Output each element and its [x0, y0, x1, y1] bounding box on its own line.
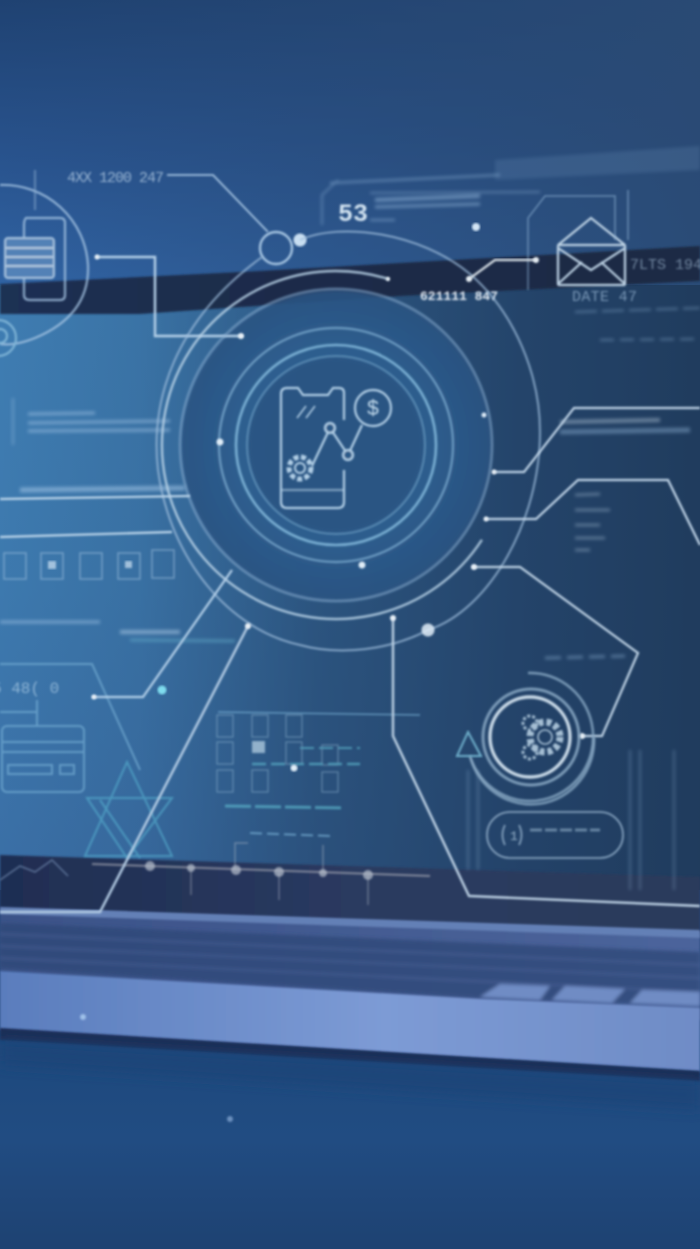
icon: gear in rings — [470, 673, 594, 804]
laptop keyboard deck — [0, 908, 700, 1020]
timeline on lower bezel — [0, 843, 430, 905]
connector: left lower long — [0, 626, 248, 912]
left data bars — [20, 488, 185, 490]
node dot — [294, 234, 306, 246]
ring 1 — [95, 204, 577, 686]
connector: right lower to gear — [472, 567, 638, 736]
panel: credit card, lower left — [0, 664, 140, 792]
horizontal lines, left — [0, 496, 190, 537]
label: bezel code: 621111 847 — [420, 289, 498, 304]
faint screen data, left — [0, 398, 235, 641]
dark band: lower bezel of screen — [0, 855, 700, 935]
connector: envelope to center — [469, 260, 536, 279]
row of small squares, left — [4, 550, 174, 579]
particle dots — [80, 1014, 233, 1122]
connector: upper left elbow — [97, 257, 243, 336]
connector: right upper — [494, 408, 700, 472]
faint data, right — [468, 308, 700, 890]
background: screen dark falloff to the right — [0, 285, 700, 890]
connector: right middle — [486, 480, 700, 545]
connector: left lower short — [92, 570, 232, 697]
ring markers — [216, 412, 486, 636]
frame around envelope — [528, 190, 628, 290]
rings around central dial — [95, 204, 577, 686]
pill status box — [487, 812, 623, 858]
dot upper centre — [472, 223, 480, 231]
pill label: 1 — [510, 829, 518, 844]
outer arc — [157, 231, 540, 650]
background: upper right muted tone — [0, 0, 700, 300]
connector: label to small ring — [167, 175, 268, 232]
label: right bezel code: 7LTS 194 — [630, 257, 700, 274]
panel: data grid, lower center — [217, 712, 420, 836]
ring 4 — [247, 356, 425, 534]
central dial disc — [181, 290, 491, 600]
label: 53: 53 — [338, 200, 368, 229]
icon: warning triangle — [457, 732, 481, 756]
grid dot — [290, 764, 298, 772]
bottom surface — [0, 1030, 700, 1249]
label: top code: 4XX 1200 247 — [67, 170, 164, 187]
background: laptop screen — [0, 285, 700, 890]
ring 2 — [219, 328, 453, 562]
inner dial darker — [248, 357, 424, 533]
glow under laptop — [0, 1040, 700, 1110]
icon: envelope — [558, 218, 625, 285]
icon: credit card and phone, upper left — [0, 170, 88, 356]
small ring node — [260, 232, 292, 264]
background: translucent light strip upper right — [495, 146, 700, 180]
cyan dot — [158, 686, 166, 694]
triangles, lower left — [85, 762, 172, 858]
icon: phone with chart, gear and dollar — [281, 388, 391, 508]
connector nodes — [386, 257, 539, 282]
ring 3 — [236, 345, 436, 545]
background: upper wall gradient — [0, 0, 700, 300]
keyboard keys — [0, 923, 700, 1006]
laptop front dark edge — [0, 1028, 700, 1081]
dollar sign: $ — [367, 397, 379, 420]
label: date: DATE 47 — [572, 289, 637, 306]
faint data, upper center — [322, 175, 540, 225]
dark band: top bezel of screen — [0, 246, 700, 314]
laptop palm rest — [0, 971, 700, 1072]
light deck edge — [0, 907, 700, 938]
connector: bottom right — [393, 618, 700, 906]
connector nodes — [92, 254, 585, 739]
